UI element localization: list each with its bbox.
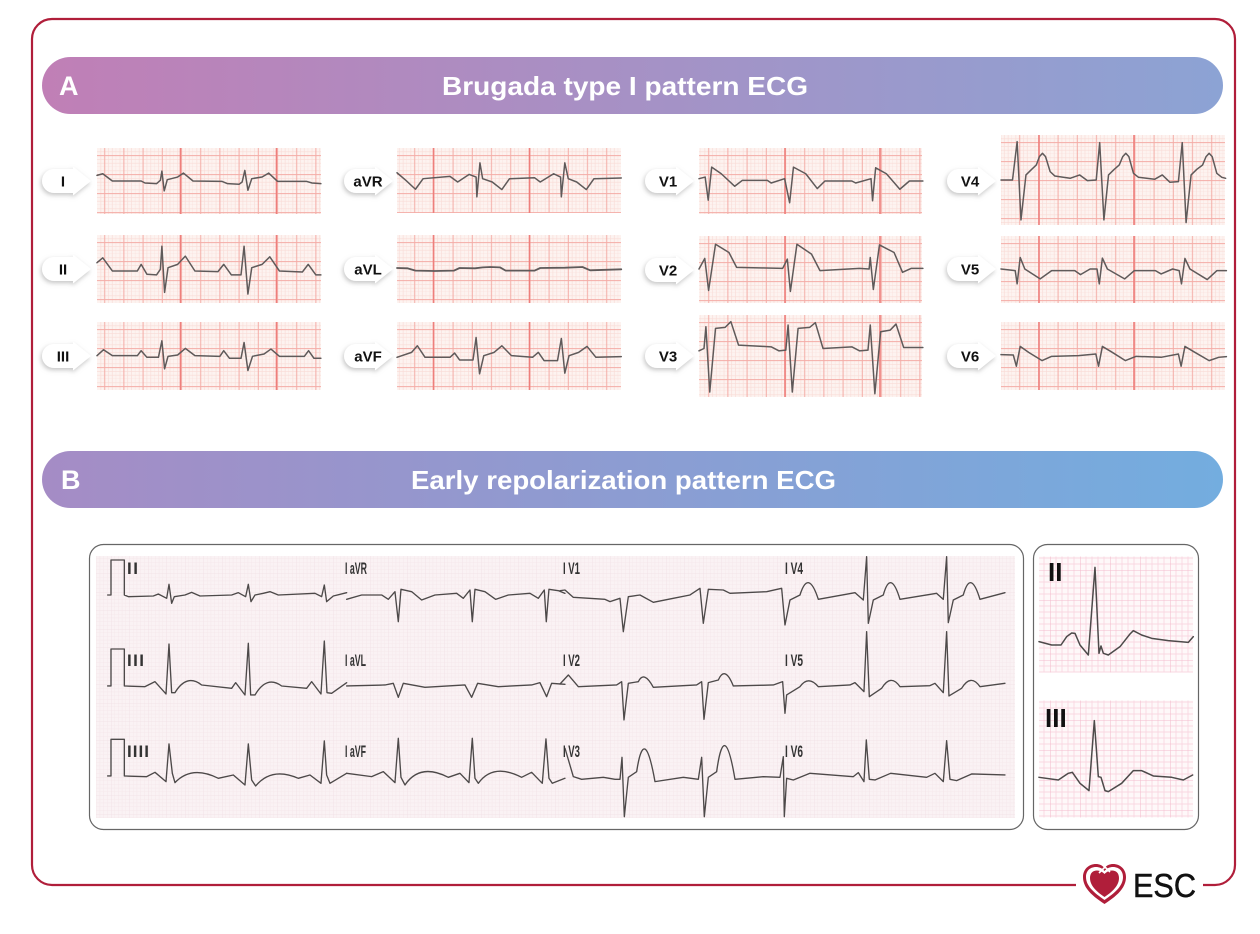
lead label: V3: [645, 342, 694, 370]
lead label: V5: V5: [961, 262, 979, 278]
lead label: V6: V6: [961, 348, 979, 366]
traces: chest leads V1 to V6: [560, 557, 1005, 817]
lead label: aVR: [344, 166, 393, 196]
lead label: II: II: [59, 262, 67, 278]
lead label: aVF: [344, 342, 393, 370]
ECG strip: lead V4: [1001, 135, 1226, 225]
header B: Early repolarization pattern ECG: Early repolarization pattern ECG: [411, 465, 836, 495]
close-up strip: lead II: II: [1048, 557, 1062, 587]
lead label: V2: [645, 256, 694, 284]
ECG lead labels: I V1: [563, 559, 580, 578]
lead label: aVR: aVR: [353, 174, 383, 190]
ECG lead labels: I V3: [563, 742, 580, 761]
lead label: III: III: [57, 348, 69, 366]
ECG lead labels: I aVL: [345, 651, 366, 670]
ECG lead labels: I aVF: [345, 742, 366, 761]
lead label: V2: V2: [659, 262, 677, 280]
panel: leads II and III close-up: [1034, 544, 1198, 830]
header B: Early repolarization pattern ECG: [42, 451, 1223, 508]
header A: Brugada type 1 pattern ECG: A: [59, 71, 78, 101]
logo: ESC: ESC: [1133, 867, 1196, 904]
header A: Brugada type 1 pattern ECG: [42, 57, 1223, 114]
lead label: V4: V4: [961, 174, 980, 190]
header A: Brugada type 1 pattern ECG: Brugada type I pattern ECG: [442, 71, 808, 101]
ECG lead labels: [127, 559, 803, 761]
ECG lead labels: I I: [127, 559, 138, 578]
lead label: aVF: aVF: [354, 348, 382, 366]
ECG strip: lead III: [97, 322, 321, 390]
close-up strip: lead III: [1039, 700, 1193, 818]
lead label: aVL: [344, 254, 393, 284]
ECG strip: lead aVR: [397, 148, 621, 213]
logo: ESC: [1083, 864, 1196, 904]
lead label: V6: [947, 342, 996, 370]
lead label: I: I: [61, 174, 65, 190]
close-up strip: lead III: III: [1045, 703, 1067, 733]
lead label: V3: V3: [659, 348, 677, 366]
ECG strip: lead aVF: [397, 322, 621, 390]
close-up strip: lead II: [1039, 556, 1193, 672]
ECG strip: lead V6: [1001, 322, 1226, 390]
ECG strip: lead II: [97, 235, 321, 303]
ECG lead labels: I V6: [785, 742, 803, 761]
header B: Early repolarization pattern ECG: B: [61, 465, 80, 495]
panel: 12-lead ECG: [90, 544, 1024, 830]
ECG strip: lead aVL: [397, 235, 621, 303]
ECG lead labels: I aVR: [345, 559, 367, 578]
lead label: I: [42, 166, 91, 196]
ECG strip: lead V2: [699, 236, 923, 303]
ECG lead labels: I V2: [563, 651, 580, 670]
lead label: II: [42, 254, 91, 284]
ECG lead labels: I I I: [127, 651, 144, 670]
ECG strip: lead I: [97, 148, 321, 214]
lead label: V1: V1: [659, 174, 677, 190]
lead label: V5: [947, 254, 996, 284]
traces: limb leads I, II, III, aVR, aVL, aVF: [108, 560, 565, 786]
lead label: III: [42, 342, 91, 370]
lead label: aVL: aVL: [354, 262, 382, 278]
ECG lead labels: I V5: [785, 651, 803, 670]
ECG strip: lead V5: [1001, 236, 1226, 303]
ECG lead labels: I I I I: [127, 742, 149, 761]
ECG strip: lead V3: [699, 315, 923, 397]
lead label: V4: [947, 166, 996, 196]
ECG strip: lead V1: [699, 148, 923, 214]
ECG lead labels: I V4: [785, 559, 803, 578]
lead label: V1: [645, 166, 694, 196]
